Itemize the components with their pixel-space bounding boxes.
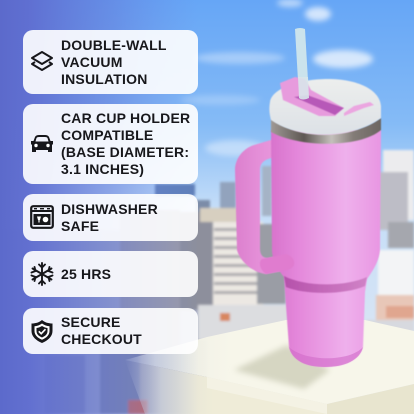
tumbler: [235, 28, 381, 367]
lid rotating tab: [280, 77, 374, 116]
text: VACUUM: [61, 54, 123, 70]
straw lower: [298, 77, 309, 100]
text: DISHWASHER: [61, 201, 158, 217]
text: DOUBLE-WALL: [61, 37, 167, 53]
text: COMPATIBLE: [61, 127, 153, 143]
panel: dishwasher safe: [23, 194, 198, 241]
text: CHECKOUT: [61, 331, 142, 347]
text: SECURE: [61, 314, 121, 330]
text: (BASE DIAMETER:: [61, 144, 189, 160]
icon: straw: [295, 28, 309, 98]
panel: car cup holder compatible: [23, 104, 198, 184]
text: SAFE: [61, 218, 99, 234]
text: INSULATION: [61, 71, 148, 87]
text: [61, 110, 190, 177]
icon: car: [31, 135, 53, 152]
steel band: [271, 118, 381, 144]
icon: dishwasher: [30, 205, 54, 229]
text: [61, 37, 167, 87]
table: [125, 320, 414, 414]
text: 3.1 INCHES): [61, 161, 144, 177]
lid: [269, 79, 381, 135]
body band: [284, 276, 367, 293]
text: [61, 201, 158, 234]
panel: secure checkout: [23, 308, 198, 354]
tumbler body: [271, 130, 381, 367]
handle lower joint: [260, 254, 294, 274]
panel: 25 hrs: [23, 251, 198, 297]
text: [61, 314, 142, 347]
icon: layers: [31, 51, 53, 71]
handle: [235, 137, 294, 274]
panel: double-wall vacuum insulation: [23, 30, 198, 94]
icon: snowflake: [30, 262, 54, 286]
text: 25 HRS: [61, 266, 111, 282]
text: CAR CUP HOLDER: [61, 110, 190, 126]
icon: shield: [32, 320, 52, 343]
